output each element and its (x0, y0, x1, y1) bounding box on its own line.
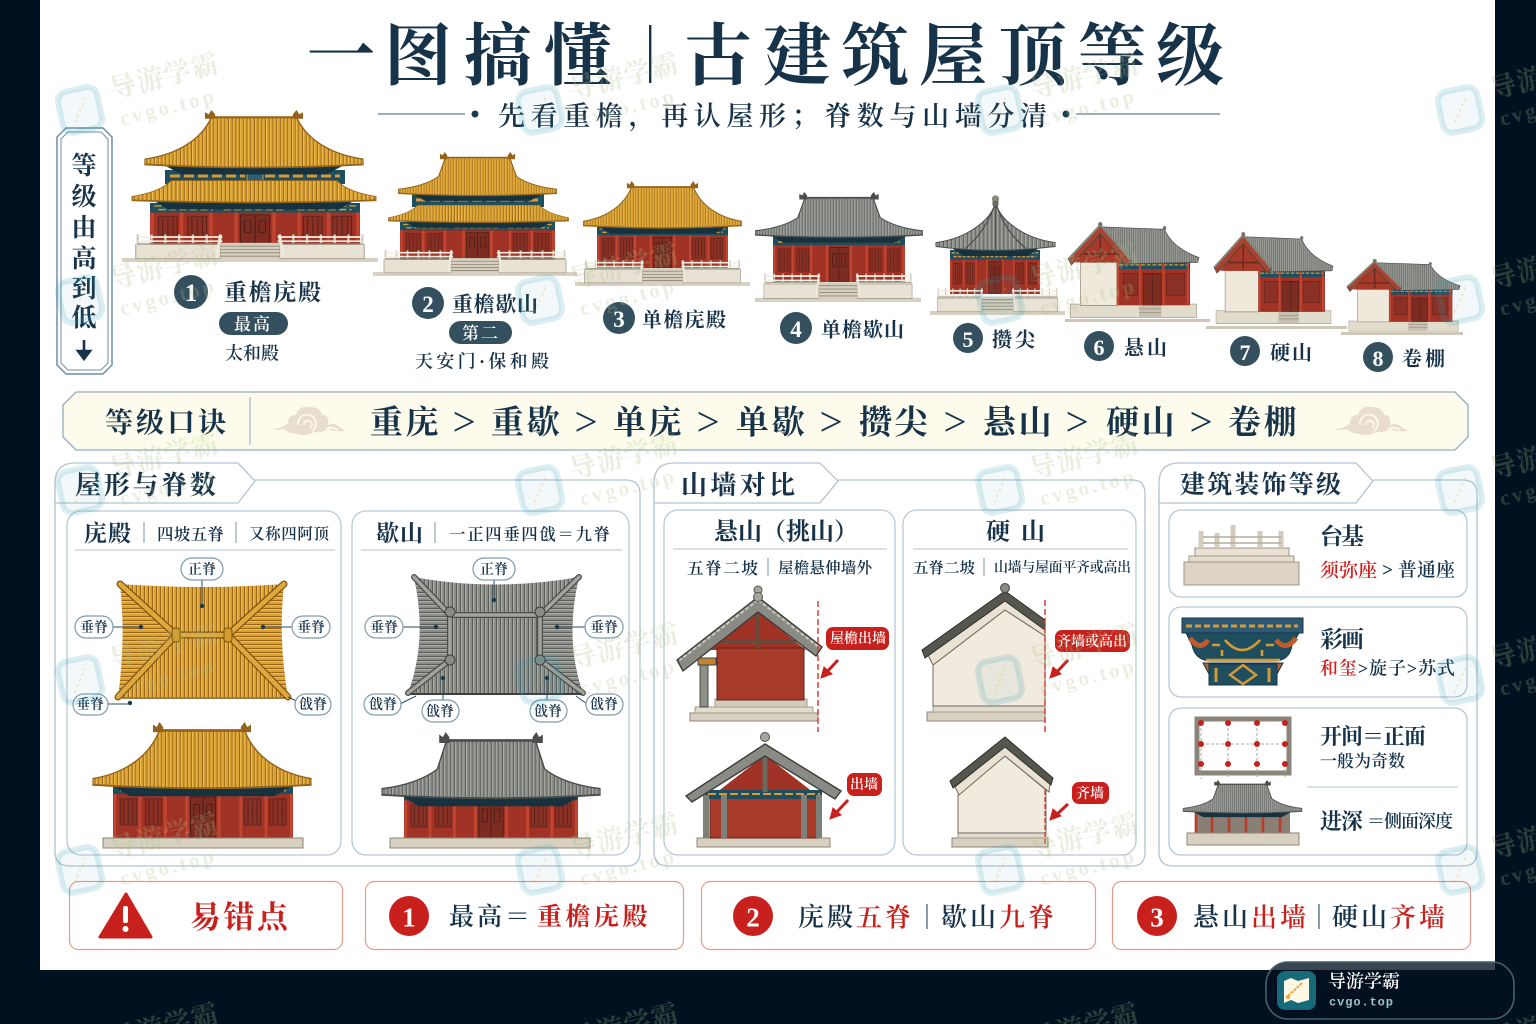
card: flush gable: 五脊二坡 (913, 559, 975, 577)
grade direction scale: 到 (71, 275, 97, 303)
rank 7 label: 7 (1240, 340, 1250, 365)
overhanging gable drawing 2 (686, 732, 841, 847)
mistake 2 (702, 882, 1096, 950)
rank 4 label (780, 312, 904, 344)
rank 3 label: 单檐庑殿 (642, 308, 726, 332)
rank 1 label (174, 275, 321, 364)
mistake 3: 硬山齐墙 (1332, 903, 1448, 932)
card: overhanging gable: 悬山（挑山） (714, 518, 858, 546)
rank 1 label: 最高 (234, 315, 272, 334)
brand badge (1266, 962, 1514, 1019)
panel tab heading: 山墙对比 (681, 471, 795, 500)
gable-hip roof ridge labels: 正脊 (480, 561, 508, 578)
mistake 1: 重檐庑殿 (537, 902, 651, 931)
overhanging gable drawing 1 (677, 586, 822, 721)
mistake 1: 最高＝ (449, 903, 533, 931)
rank 7 building: flush gable (1206, 232, 1347, 329)
grade direction scale: 由 (71, 214, 97, 242)
callout: flush or raised: 齐墙或高出 (1057, 633, 1127, 650)
panel tab heading (55, 463, 255, 503)
card: flush gable: 山墙与屋面平齐或高出 (994, 559, 1131, 576)
rank 3 building: single-eave hip (575, 181, 750, 286)
icon: stone platform (1184, 525, 1299, 585)
icon: painted bracket (1182, 618, 1303, 685)
gable-hip roof ridge labels: 戗脊 (590, 696, 618, 713)
rank 3 label (603, 302, 726, 334)
gable-hip roof ridge labels: 垂脊 (370, 619, 398, 636)
mnemonic items: 攒尖 (859, 404, 930, 442)
title: 古建筑屋顶等级 (684, 18, 1224, 94)
dashed alignment line (1044, 600, 1046, 732)
rank 2 label: 天安门·保和殿 (415, 352, 549, 372)
mistake 2: 庑殿五脊 (798, 903, 914, 932)
card: hip roof: 四坡五脊 (157, 525, 224, 544)
card: gable-hip roof: 歇山 (376, 521, 423, 546)
rank 8 building: round ridge (1341, 259, 1463, 335)
card: bays and depth (1169, 708, 1467, 855)
rank 2 label: 重檐歇山 (452, 292, 538, 316)
mistake 2: 2 (746, 902, 760, 932)
mnemonic bar: 等级口诀 (105, 407, 226, 439)
gable-hip roof plan diagram (408, 577, 583, 694)
mnemonic sequence: 重庑 (370, 404, 441, 442)
mistake 3 (1112, 882, 1470, 950)
callout: flush (1050, 782, 1109, 820)
subtitle: 先看重檐，再认屋形；脊数与山墙分清 (498, 102, 1047, 132)
grade direction scale: 高 (71, 244, 97, 273)
panel tab heading (654, 463, 838, 503)
hip roof elevation (93, 722, 311, 848)
card: bays and depth: 进深 (1320, 809, 1363, 834)
card: hip roof: 又称四阿顶 (249, 525, 329, 543)
callout: flush or raised (1050, 630, 1130, 678)
gable-hip roof ridge labels (364, 558, 623, 722)
mnemonic items: 单歇 (736, 404, 807, 442)
title (307, 18, 1224, 94)
hip roof ridge labels: 正脊 (188, 561, 216, 578)
rank 7 label: 硬山 (1270, 342, 1312, 364)
rank 7 label (1230, 336, 1312, 366)
hip roof ridge labels (73, 558, 331, 715)
hip roof ridge labels: 垂脊 (76, 696, 104, 713)
rank 1 label: 1 (185, 280, 197, 307)
brand badge: cvgo.top (1329, 996, 1393, 1010)
gable-hip roof elevation (382, 732, 600, 848)
panel: roof form and ridges (55, 463, 640, 866)
rank 4 building: single-eave gable-hip (755, 192, 923, 302)
hip roof plan diagram (118, 584, 288, 698)
icon: column grid plan (1197, 719, 1289, 779)
callout: overhang (830, 773, 882, 819)
mnemonic items: 单庑 (613, 404, 684, 442)
rank 1 label: 重檐庑殿 (224, 280, 321, 305)
mnemonic items: 硬山 (1106, 406, 1177, 442)
card: overhanging gable: 屋檐悬伸墙外 (778, 558, 873, 577)
card: bays and depth: 开间＝正面 (1320, 724, 1426, 749)
grade direction scale: 低 (71, 304, 97, 332)
rank 1 label: 太和殿 (225, 344, 279, 364)
rank 8 label (1363, 342, 1445, 372)
mistake 1 (366, 882, 684, 950)
callout: eave overhang (821, 627, 889, 678)
rank 2 building: double-eave gable-hip (373, 152, 577, 276)
card: painted decoration (1169, 607, 1467, 697)
panel: decoration grades (1159, 463, 1477, 866)
grade direction scale (57, 128, 112, 374)
panel tab heading: 屋形与脊数 (75, 471, 216, 500)
card: flush gable: 硬山 (986, 518, 1045, 546)
gable-hip roof ridge labels: 戗脊 (426, 703, 454, 720)
dashed alignment line (817, 601, 819, 732)
card: hip roof (67, 511, 341, 855)
title: 一图搞懂 (307, 18, 612, 94)
icon: map logo (1277, 971, 1316, 1010)
hip roof ridge labels: 垂脊 (297, 619, 325, 636)
grade direction scale: 级 (71, 183, 97, 211)
card: overhanging gable (664, 510, 895, 855)
mistake 1: 1 (402, 902, 416, 932)
rank 5 label: 5 (962, 327, 974, 352)
rank 5 building: pyramid roof (930, 195, 1065, 315)
rank 3 label: 3 (613, 307, 625, 332)
rank 8 label: 卷棚 (1402, 348, 1445, 370)
rank 5 label: 攒尖 (992, 328, 1037, 352)
card: overhanging gable: 五脊二坡 (687, 559, 758, 578)
card: painted decoration: 彩画 (1320, 627, 1364, 652)
panel tab heading (1159, 463, 1373, 503)
mnemonic items: 卷棚 (1228, 404, 1299, 442)
rank 5 label (953, 323, 1037, 353)
panel tab heading: 建筑装饰等级 (1180, 471, 1341, 499)
rank 6 label: 悬山 (1124, 336, 1167, 360)
icon: warning triangle (100, 894, 151, 937)
mistake 2: 歇山九脊 (941, 903, 1057, 932)
rank 2 label: 2 (422, 292, 434, 317)
panel: gable wall comparison (654, 463, 1145, 866)
warning box: 易错点 (190, 900, 290, 935)
brand badge: 导游学霸 (1328, 972, 1400, 992)
hip roof ridge labels: 垂脊 (80, 619, 108, 636)
gable-hip roof ridge labels: 戗脊 (534, 703, 562, 720)
card: painted decoration: 和玺>旋子>苏式 (1320, 658, 1455, 678)
rank 6 building: overhanging gable (1065, 222, 1210, 322)
mnemonic items: >>>>>>> (452, 398, 1213, 444)
subtitle (378, 102, 1220, 132)
rank 1 building: double-eave hip (122, 110, 378, 262)
card: gable-hip roof: 一正四垂四戗＝九脊 (449, 525, 610, 544)
gable-hip roof ridge labels: 垂脊 (590, 619, 618, 636)
flush gable drawing 1 (922, 584, 1045, 721)
gable-hip roof ridge labels: 戗脊 (369, 696, 397, 713)
rank 6 label (1084, 331, 1167, 361)
icon: right cloud (1334, 407, 1408, 435)
callout: eave overhang: 屋檐出墙 (830, 630, 886, 647)
card: platform base: 台基 (1320, 524, 1364, 549)
warning box (70, 882, 342, 950)
rank 6 label: 6 (1094, 335, 1104, 360)
mnemonic items: 重歇 (491, 404, 562, 442)
mistake 3: 3 (1150, 902, 1164, 932)
card: bays and depth: ＝侧面深度 (1367, 812, 1453, 832)
mnemonic bar (63, 392, 1468, 450)
card: platform base: 须弥座 > 普通座 (1320, 559, 1455, 581)
card: bays and depth: 一般为奇数 (1320, 752, 1405, 771)
grade direction scale: 等 (71, 152, 97, 180)
rank 2 label: 第二 (462, 324, 500, 343)
rank 4 label: 单檐歇山 (821, 318, 904, 342)
card: hip roof: 庑殿 (84, 521, 131, 546)
card: platform base (1169, 510, 1467, 597)
flush gable drawing 2 (950, 737, 1053, 847)
mnemonic items: 悬山 (983, 404, 1054, 442)
icon: small hall elevation (1183, 780, 1302, 845)
hip roof ridge labels: 戗脊 (299, 696, 327, 713)
icon: left cloud (272, 407, 346, 435)
rank 2 label (412, 287, 549, 372)
callout: flush: 齐墙 (1076, 785, 1104, 802)
card: gable-hip roof (352, 511, 629, 855)
rank 8 label: 8 (1372, 346, 1384, 371)
card: flush gable (903, 510, 1136, 855)
callout: overhang: 出墙 (850, 776, 878, 793)
rank 4 label: 4 (790, 317, 802, 342)
mistake 3: 悬山出墙 (1193, 903, 1309, 932)
